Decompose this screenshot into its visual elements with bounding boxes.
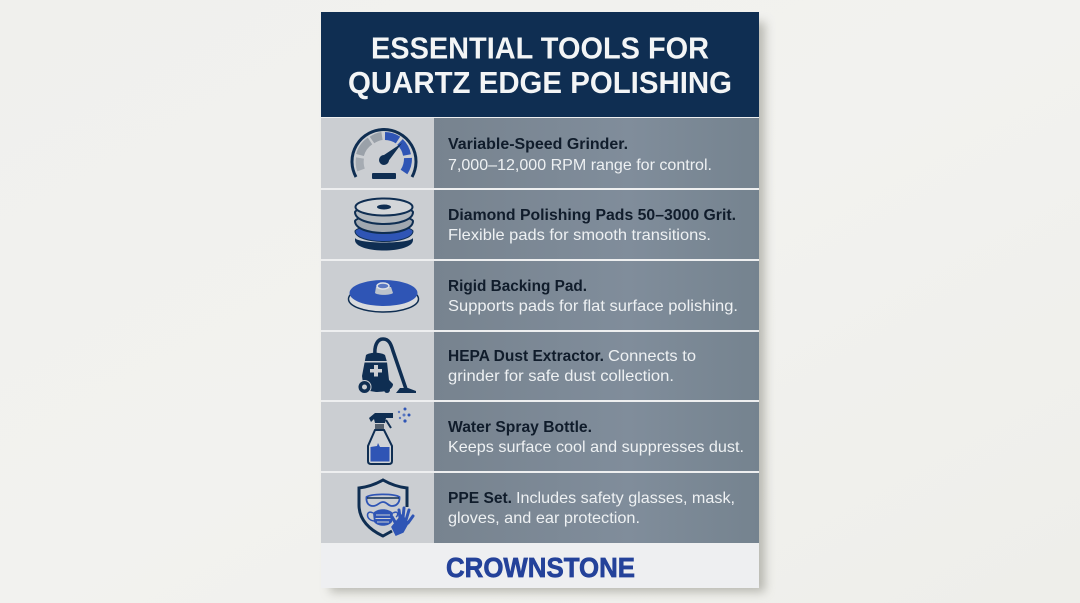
- grinder text: [448, 136, 712, 174]
- extractor text: [448, 348, 696, 385]
- PPE text: PPE Set.: [448, 490, 512, 507]
- grinder text: Variable-Speed Grinder.: [448, 136, 628, 153]
- icon: speed gauge: [352, 130, 416, 179]
- backing pad text: Supports pads for flat surface polishing.: [448, 298, 738, 315]
- icon: backing pad: [348, 280, 418, 312]
- pads text: Flexible pads for smooth transitions.: [448, 227, 711, 244]
- title: QUARTZ EDGE POLISHING: [348, 65, 732, 100]
- grinder text: 7,000–12,000 RPM range for control.: [448, 157, 712, 174]
- PPE text: [448, 490, 735, 527]
- row: rigid backing pad: [321, 261, 759, 330]
- poster card: [321, 12, 759, 588]
- spray text: Keeps surface cool and suppresses dust.: [448, 439, 744, 456]
- PPE text: Includes safety glasses, mask,: [516, 490, 735, 507]
- title: [348, 30, 732, 100]
- row: PPE set: [321, 473, 759, 543]
- header banner: [321, 12, 759, 117]
- extractor text: Connects to: [608, 348, 696, 365]
- row: water spray bottle: [321, 402, 759, 471]
- icon: vacuum: [358, 339, 416, 394]
- backing pad text: Rigid Backing Pad.: [448, 278, 587, 295]
- extractor text: grinder for safe dust collection.: [448, 368, 674, 385]
- row: diamond polishing pads: [321, 190, 759, 259]
- spray text: [448, 419, 744, 456]
- icon: spray bottle: [368, 408, 410, 464]
- pads text: Diamond Polishing Pads 50–3000 Grit.: [448, 207, 736, 224]
- icon: pad stack: [355, 198, 413, 250]
- pads text: [448, 207, 736, 244]
- row: variable-speed grinder: [321, 118, 759, 188]
- footer brand: CROWNSTONE: [446, 552, 635, 583]
- footer brand: [321, 544, 759, 588]
- icon: PPE shield: [359, 480, 413, 536]
- spray text: Water Spray Bottle.: [448, 419, 592, 436]
- title: ESSENTIAL TOOLS FOR: [371, 30, 709, 66]
- PPE text: gloves, and ear protection.: [448, 510, 640, 527]
- row: HEPA dust extractor: [321, 332, 759, 400]
- extractor text: HEPA Dust Extractor.: [448, 348, 604, 365]
- backing pad text: [448, 278, 738, 315]
- glove: [392, 508, 413, 535]
